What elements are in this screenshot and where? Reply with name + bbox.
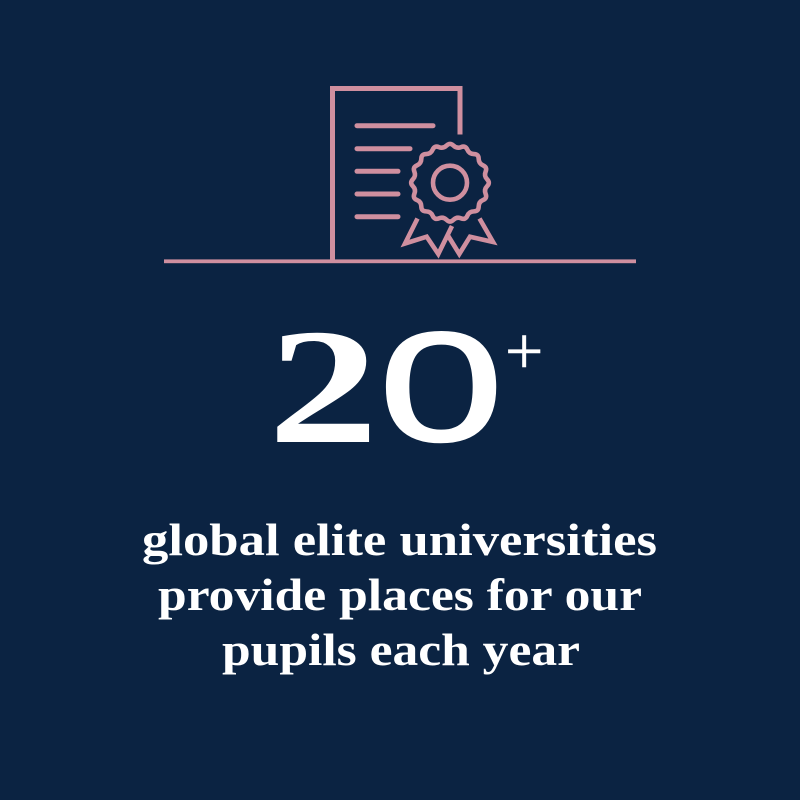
icon: seal inner circle	[433, 166, 467, 200]
caption line 2: provide places for our	[158, 570, 642, 620]
caption line 1: global elite universities	[142, 515, 657, 565]
plus sign: +	[505, 313, 543, 389]
big number: 20+	[268, 296, 543, 478]
caption text	[142, 515, 657, 675]
icon: certificate with rosette seal	[332, 88, 493, 262]
baseline rule	[164, 259, 636, 263]
caption line 3: pupils each year	[222, 625, 580, 675]
icon: document outline	[332, 88, 460, 262]
icon: ribbon tails	[405, 218, 493, 254]
digit 0: 0	[379, 300, 503, 474]
icon: document text lines	[357, 126, 433, 217]
digit 2: 2	[268, 296, 379, 478]
icon: scalloped seal	[411, 144, 489, 222]
